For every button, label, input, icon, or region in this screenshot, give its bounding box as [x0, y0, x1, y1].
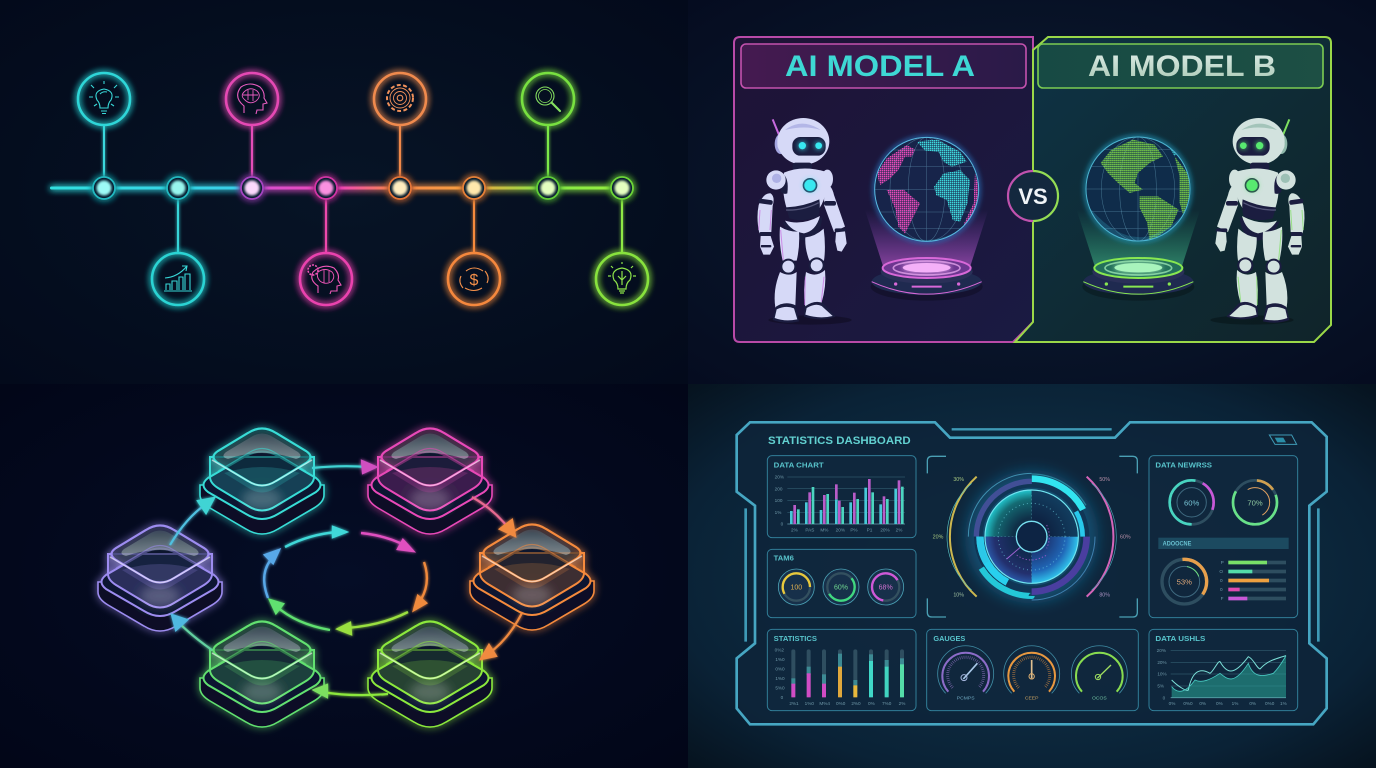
panel: statistics bars: 0%0: [775, 667, 785, 672]
panel: data usage: 10%: [1157, 672, 1167, 677]
side arc right: [1087, 477, 1116, 597]
timeline connectors: [104, 126, 622, 253]
radial labels: 10%: [953, 592, 964, 598]
donut: 60 percent: [1170, 480, 1214, 524]
panel: data chart: 1%: [775, 510, 781, 515]
horizontal bars: F: [1221, 596, 1224, 601]
donut: 53 percent: 53%: [1177, 578, 1192, 587]
horizontal bars: 0: [1220, 578, 1223, 583]
robot A: [757, 118, 852, 325]
banner: [1158, 538, 1289, 549]
panel: data chart: 2%: [791, 528, 798, 533]
horizontal bars: O: [1219, 569, 1223, 574]
panel: data usage: 1%: [1280, 701, 1287, 706]
panel: statistics bars: M%4: [819, 701, 830, 706]
panel: tam dials: TAM6: [774, 554, 794, 563]
heading: AI model B: AI MODEL B: [1088, 50, 1276, 83]
icon: light bulb lime: [608, 262, 636, 293]
radial labels: 20%: [933, 535, 944, 541]
panel: data chart: 2%: [896, 528, 902, 533]
isometric cycle infographic: [98, 428, 594, 727]
radial rings: [968, 473, 1095, 600]
panel: data usage: 20%: [1157, 660, 1167, 665]
comparison infographic: [734, 37, 1331, 342]
timeline icon circles: [78, 73, 648, 305]
icon: magnifier: [536, 87, 560, 111]
timeline nodes: [93, 177, 633, 199]
gauge: orange: CEEP: [1025, 696, 1039, 702]
radial labels: [933, 477, 1131, 598]
heading: AI model A: [741, 44, 1026, 88]
horizontal bars: [1219, 560, 1286, 601]
panel: statistics bars: 2%0: [851, 701, 861, 706]
panel: tam dials: 60%: [834, 585, 848, 592]
icon: light bulb cyan: [89, 81, 119, 114]
icon: brain gear head: [308, 265, 341, 294]
panel: statistics bars: 1%0: [775, 657, 785, 662]
panel: tam dials: 100: [791, 585, 802, 592]
radial labels: 30%: [953, 477, 964, 483]
block: lime: [368, 622, 492, 727]
panel: data news: [1149, 456, 1298, 618]
panel: statistics bars: 7%0: [882, 701, 892, 706]
gauge: violet: PCMPS: [957, 696, 975, 702]
radial sectors: [985, 490, 1078, 583]
gauge: orange: [1004, 646, 1060, 702]
horizontal bars: 0: [1220, 587, 1223, 592]
panel: data usage: 0%: [1169, 701, 1175, 706]
hologram globe A: [865, 134, 988, 301]
panel: statistics bars: 0%2: [775, 648, 784, 653]
panel: data chart: 20%: [836, 528, 845, 533]
donut: 53 percent: [1162, 559, 1207, 604]
panel: statistics bars: 5%0: [775, 686, 785, 691]
panel: data news: DATA NEWRSS: [1155, 460, 1212, 469]
panel: tam dials: [767, 549, 916, 618]
panel: data usage: DATA USHLS: [1155, 634, 1205, 643]
panel: data chart: P%: [850, 528, 858, 533]
side arc left: [947, 477, 977, 597]
donut: 70 percent: 70%: [1247, 498, 1263, 507]
hologram globe B: [1077, 134, 1200, 301]
panel: cycle background: [0, 384, 688, 768]
panel: data chart: 20%: [880, 528, 890, 533]
gauge: violet: [938, 646, 994, 702]
block: green: [200, 622, 324, 727]
panel: comparison background: [688, 0, 1376, 384]
panel: data usage: 0%0: [1183, 701, 1193, 706]
VS badge: VS: [1018, 184, 1048, 209]
panel: dashboard background: [688, 384, 1376, 768]
panel: data chart: 20%: [775, 475, 784, 480]
panel: data chart: DATA CHART: [774, 460, 824, 469]
panel: tam dials: 68%: [879, 585, 893, 592]
block: orange: [470, 524, 594, 630]
dashboard frame: [737, 422, 1327, 724]
radial labels: 60%: [1120, 535, 1131, 541]
panel: statistics bars: 1%0: [805, 701, 814, 706]
outer cycle arrows: [170, 461, 522, 697]
block: magenta: [368, 428, 492, 534]
heading: AI model B: [1038, 44, 1323, 88]
panel: statistics bars: 2%: [899, 701, 905, 706]
icon: dollar cycle: [460, 268, 488, 290]
frame accents: [746, 429, 1318, 642]
radial labels: 50%: [1099, 477, 1110, 483]
gauge: green: [1071, 646, 1127, 702]
panel: data usage: 0%: [1216, 701, 1223, 706]
panel: data usage: 0%: [1199, 701, 1206, 706]
panel: statistics bars: [767, 629, 916, 711]
panel: data usage: 1%: [1232, 701, 1238, 706]
panel: data usage: 0: [1163, 695, 1166, 700]
panel: data usage: 20%: [1157, 648, 1166, 653]
statistics dashboard: [737, 422, 1327, 724]
donut: 70 percent: [1233, 480, 1277, 524]
panel: gauges: [927, 629, 1138, 711]
panel: statistics bars: STATISTICS: [774, 634, 817, 643]
panel: data usage: [1149, 629, 1298, 711]
timeline main line: [50, 186, 632, 190]
panel: statistics bars: 2%1: [789, 701, 799, 706]
panel: statistics bars: 0%0: [836, 701, 846, 706]
icon: brain head: [238, 84, 267, 114]
banner: ADOOCNE: [1163, 541, 1191, 548]
heading: statistics dashboard: STATISTICS DASHBOARD: [768, 435, 911, 447]
panel: data chart: M%: [820, 528, 828, 533]
panel: data chart: 200: [775, 486, 783, 491]
panel: statistics bars: 1%0: [775, 676, 785, 681]
radial labels: 80%: [1099, 592, 1110, 598]
panel: data chart: P1: [867, 528, 873, 533]
robot B: [1210, 118, 1305, 325]
inner cycle arrows: [264, 527, 427, 634]
panel: AI model B: [1015, 37, 1331, 342]
panel: data chart: PAS: [805, 528, 814, 533]
panel: statistics bars: 0%: [868, 701, 875, 706]
timeline infographic: [50, 73, 648, 305]
heading: AI model A: AI MODEL A: [785, 50, 975, 83]
panel: gauges: GAUGES: [933, 634, 965, 643]
corner brackets: [927, 456, 1137, 617]
panel: data usage: 0%0: [1265, 701, 1275, 706]
icon: growth chart: [164, 266, 192, 291]
gauge: green: OCOS: [1092, 696, 1107, 702]
donut: 60 percent: 60%: [1184, 498, 1200, 507]
panel: statistics bars: 0: [781, 695, 784, 700]
panel: data chart: [767, 456, 916, 538]
central radial hologram: [927, 456, 1137, 617]
icon: dollar cycle: $: [470, 272, 479, 289]
horizontal bars: P: [1221, 560, 1224, 565]
panel: AI model A: [734, 37, 1033, 342]
icon: gear: [387, 85, 413, 111]
panel: data chart: 100: [775, 498, 783, 503]
block: teal: [200, 428, 324, 534]
block: violet: [98, 526, 222, 631]
panel: timeline background: [0, 0, 688, 384]
VS badge: [1008, 171, 1058, 221]
panel: data usage: 0%: [1249, 701, 1256, 706]
panel: data chart: 0: [781, 522, 784, 527]
panel: data usage: 5%: [1157, 684, 1164, 689]
